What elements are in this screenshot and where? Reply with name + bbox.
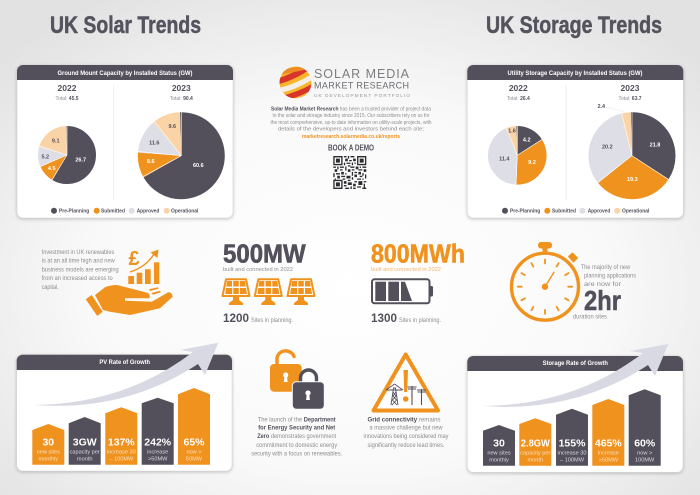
legend: ground mount: Pre-Planning <box>59 209 89 215</box>
text block: about Solar Media: the most comprehensive, up-to date information on utility-scale projects, with <box>270 120 432 126</box>
text block: government commitment: The launch of the Department <box>258 416 336 423</box>
icon: stopwatch <box>512 242 578 320</box>
text block: investment <box>42 249 119 291</box>
title: UK Solar Trends: UK Solar Trends <box>50 12 201 39</box>
text block: grid connectivity: significantly reduce lead times. <box>368 442 445 449</box>
stat: 500MW <box>222 238 314 325</box>
pie chart: ground mount 2023 <box>138 112 204 177</box>
pie chart: utility storage 2023 <box>597 104 668 183</box>
bar: new sites monthly: monthly <box>39 457 58 463</box>
bar: now over 100MW: now > <box>637 450 652 456</box>
pie chart: ground mount 2023: 11.6 <box>149 141 160 147</box>
icon: striped sphere <box>280 66 312 98</box>
bar: increase over 50MW: 465% <box>595 438 622 450</box>
bar: new sites monthly: new sites <box>487 450 511 456</box>
text block: investment: capital. <box>42 284 59 291</box>
text block: government commitment <box>251 416 342 457</box>
panel: ground mount capacity <box>17 65 233 218</box>
panel: ground mount capacity: 2022 <box>58 83 77 93</box>
panel: utility storage capacity: Total: 63.7 <box>618 96 642 102</box>
bar: capacity per month: capacity per <box>70 449 100 455</box>
bar: capacity per month: capacity per <box>520 450 551 456</box>
bar: increase 30 to 100MW: 155% <box>559 438 586 450</box>
bar: capacity per month: month <box>77 457 92 463</box>
legend: utility storage: Pre-Planning <box>510 209 540 215</box>
icon: hand holding pound and chart: £ <box>128 248 140 270</box>
bar: capacity per month: month <box>528 458 543 464</box>
bar: new sites monthly: new sites <box>37 449 60 455</box>
bar: increase 30 to 100MW: 137% <box>108 436 135 448</box>
legend: ground mount: Submitted <box>101 209 125 215</box>
bar: now over 100MW: 100MW <box>635 458 655 464</box>
stat: 800MWh: built and connected in 2022 <box>371 267 441 273</box>
bar: now over 100MW: 60% <box>634 438 656 450</box>
legend: utility storage: Submitted <box>552 209 576 215</box>
logo: Solar Media Market Research <box>280 66 410 98</box>
bar: new sites monthly <box>32 424 64 465</box>
panel: utility storage capacity <box>467 65 683 218</box>
pie chart: ground mount 2023: 60.6 <box>193 163 204 169</box>
stat: 500MW: Sites in planning. <box>251 318 293 324</box>
pie chart: utility storage 2022: 11.4 <box>499 157 510 163</box>
icon: QR code <box>333 156 366 189</box>
pie chart: ground mount 2023: 8.6 <box>147 159 155 165</box>
bar: new sites monthly: 30 <box>493 438 505 450</box>
panel: ground mount capacity: Ground Mount Capacity by Installed Status (GW) <box>58 70 192 77</box>
panel: ground mount capacity: 2023 <box>172 83 191 93</box>
panel: utility storage capacity: 2022 <box>509 83 528 93</box>
bar: now over 50MW: 65% <box>183 436 205 448</box>
panel: utility storage capacity: 2023 <box>621 83 640 93</box>
arrow: growth swoosh <box>33 343 218 406</box>
panel: utility storage capacity: Total: 26.4 <box>507 96 530 102</box>
text block: government commitment: security with a focus on renewables. <box>251 450 342 457</box>
bar: increase 30 to 100MW: increase 30 <box>558 450 586 456</box>
legend: utility storage <box>502 208 650 215</box>
stat: 800MWh <box>371 238 465 325</box>
pie chart: ground mount 2022 <box>39 126 86 180</box>
logo: Solar Media Market Research: MARKET RESEARCH <box>314 80 409 90</box>
text block: 2hr duration sites: 2hr <box>584 285 621 316</box>
text block: grid connectivity: Grid connectivity remains <box>368 416 440 423</box>
panel: storage rate of growth: Storage Rate of Growth <box>543 360 608 367</box>
bar: increase over 50MW: >50MW <box>148 457 168 463</box>
bar: new sites monthly: monthly <box>489 458 509 464</box>
bar: capacity per month: 2.8GW <box>521 438 550 450</box>
panel: storage rate of growth <box>467 344 683 472</box>
panel: ground mount capacity: Total: 45.5 <box>55 96 79 102</box>
bar: increase 30 to 100MW <box>556 409 588 466</box>
legend: utility storage: Operational <box>622 209 650 215</box>
pie chart: ground mount 2022: 26.7 <box>75 157 86 163</box>
pie chart: utility storage 2023: 2.4 <box>597 104 606 110</box>
bar: now over 50MW: 50MW <box>186 457 203 463</box>
text block: about Solar Media: marketresearch.solarmedia.co.uk/reports <box>302 134 400 140</box>
pie chart: utility storage 2022 <box>499 126 542 185</box>
arrow: growth swoosh <box>483 344 668 407</box>
logo: Solar Media Market Research: UK DEVELOPMENT PORTFOLIO <box>314 93 410 99</box>
pie chart: utility storage 2022: 1.6 <box>508 128 516 134</box>
text block: 2hr duration sites: The majority of new <box>581 264 631 271</box>
legend: utility storage: Approved <box>588 209 610 215</box>
title: UK Storage Trends: UK Storage Trends <box>486 12 662 39</box>
text block: 2hr duration sites <box>573 264 636 320</box>
text block: government commitment: for Energy Security and Net <box>258 425 335 432</box>
bar: increase over 50MW: 242% <box>144 436 172 448</box>
text block: government commitment: commitment to domestic energy <box>256 442 338 449</box>
panel: utility storage capacity: Utility Storage Capacity by Installed Status (GW) <box>508 70 642 77</box>
text block: 2hr duration sites: planning applications <box>584 273 636 280</box>
text block: investment: from an increased access to <box>42 275 113 282</box>
pie chart: utility storage 2023: 21.8 <box>650 142 660 148</box>
panel: ground mount capacity: Total: 90.4 <box>170 96 193 102</box>
icon: grid warning triangle <box>374 354 438 410</box>
pie chart: ground mount 2023: 9.6 <box>168 124 176 130</box>
text block: grid connectivity: innovations being considered may <box>364 433 449 440</box>
stat: 800MWh: 1300 <box>371 313 397 325</box>
panel: PV rate of growth: PV Rate of Growth <box>99 359 150 366</box>
stat: 800MWh: Sites in planning. <box>399 318 441 324</box>
icon: battery <box>372 279 433 303</box>
bar: now over 50MW: now > <box>186 449 202 455</box>
pie chart: ground mount 2022: 5.2 <box>41 155 49 161</box>
text block: investment: is at an all time high and new <box>42 258 115 265</box>
stat: 500MW: 500MW <box>223 238 306 268</box>
bar: now over 100MW <box>629 389 661 466</box>
text block: grid connectivity <box>364 416 449 449</box>
logo: Solar Media Market Research: SOLAR MEDIA <box>314 67 410 81</box>
icon: hand holding pound and chart <box>86 248 173 316</box>
pie chart: ground mount 2022: 4.5 <box>48 166 56 172</box>
bar: capacity per month <box>69 417 101 465</box>
legend: ground mount <box>51 208 199 215</box>
bar: increase over 50MW <box>142 398 174 465</box>
stat: 800MWh: 800MWh <box>371 238 465 268</box>
stat: 500MW: 1200 <box>223 313 249 325</box>
bar: new sites monthly <box>483 425 515 466</box>
bar: increase 30 to 100MW <box>105 407 137 465</box>
text block: government commitment: Zero demonstrates government <box>257 433 336 440</box>
pie chart: utility storage 2023: 19.3 <box>627 177 638 183</box>
text block: investment: business models are emerging <box>42 266 119 274</box>
bar: increase over 50MW: >50MW <box>599 458 619 464</box>
pie chart: utility storage 2023: 20.2 <box>602 145 613 151</box>
icon: padlocks <box>270 351 324 409</box>
legend: ground mount: Approved <box>137 209 159 215</box>
bar: new sites monthly: 30 <box>42 436 54 448</box>
pie chart: utility storage 2022: 4.2 <box>523 137 531 143</box>
bar: increase over 50MW: increase <box>147 449 168 455</box>
bar: capacity per month: 3GW <box>73 436 97 448</box>
text block: grid connectivity: a massive challenge but new <box>370 425 443 432</box>
text block: about Solar Media <box>270 106 432 140</box>
bar: now over 50MW <box>178 388 210 465</box>
bar: increase 30 to 100MW: increase 30 <box>107 449 136 455</box>
stat: 500MW: built and connected in 2022 <box>223 267 293 273</box>
text block: about Solar Media: details of the developers and investors behind each site; <box>278 126 425 132</box>
heading: book a demo: BOOK A DEMO <box>328 142 374 152</box>
legend: ground mount: Operational <box>171 209 199 215</box>
text block: investment: Investment in UK renewables <box>42 249 115 256</box>
pie chart: utility storage 2022: 9.2 <box>528 160 536 166</box>
text block: 2hr duration sites: are now for <box>584 281 622 288</box>
text block: 2hr duration sites: duration sites <box>573 314 607 320</box>
bar: capacity per month <box>519 418 551 466</box>
panel: PV rate of growth <box>17 343 232 471</box>
text block: about Solar Media: to the solar and storage industry since 2015. Our subscribers rely on us for <box>272 113 430 119</box>
pie chart: ground mount 2022: 9.1 <box>52 139 60 145</box>
bar: increase over 50MW <box>592 399 624 466</box>
bar: increase 30 to 100MW: – 100MW <box>560 458 585 464</box>
icon: solar panels <box>222 279 314 305</box>
text block: about Solar Media: Solar Media Market Research has been a trusted provider of project data <box>271 106 431 112</box>
bar: increase 30 to 100MW: – 100MW <box>109 457 134 463</box>
bar: increase over 50MW: increase <box>598 450 619 456</box>
